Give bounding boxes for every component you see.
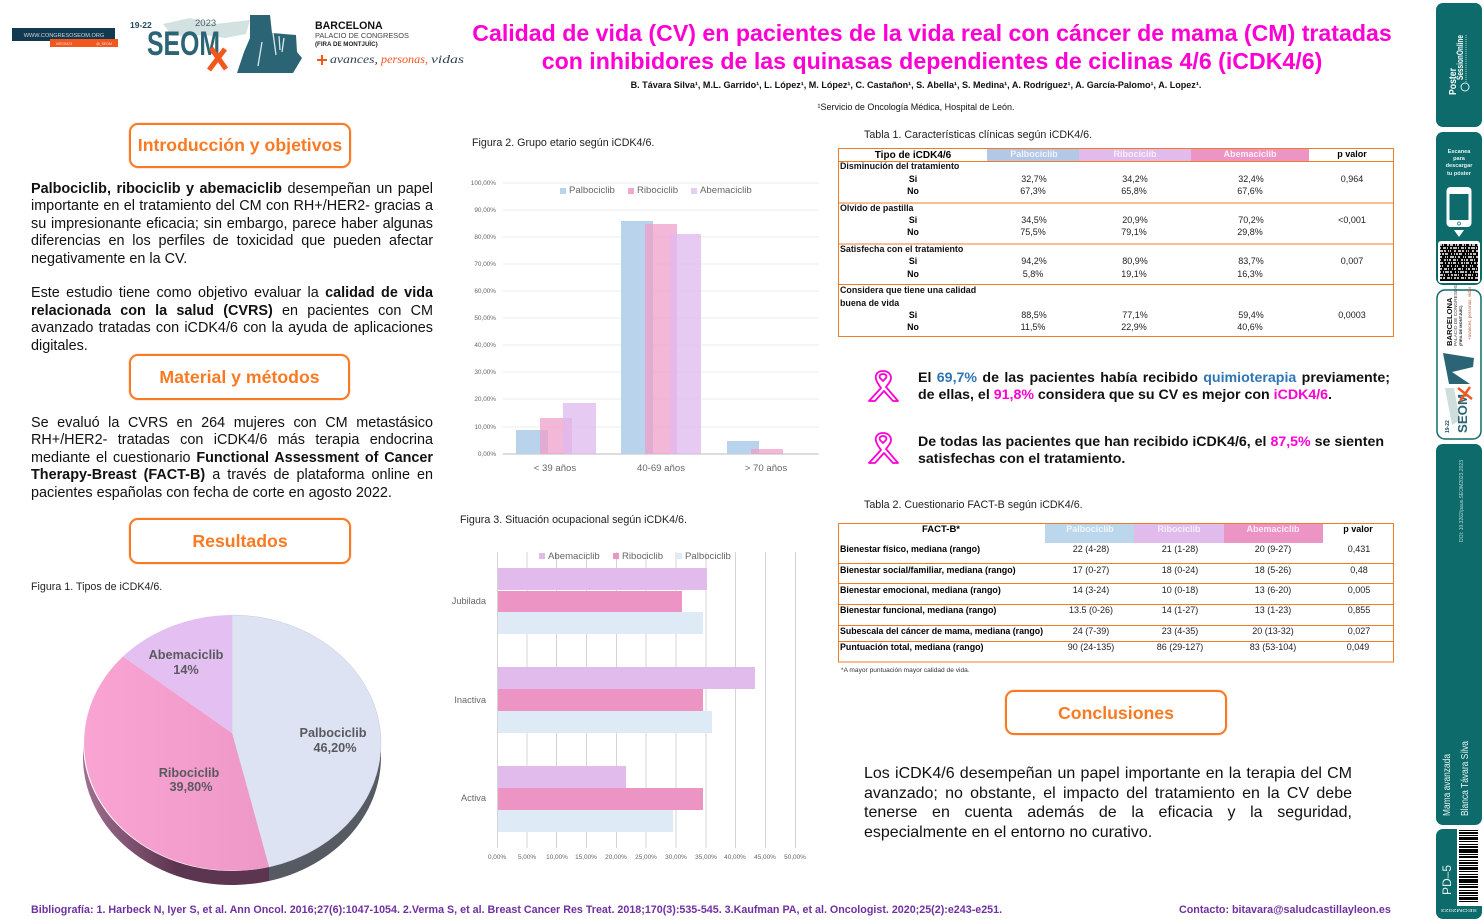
- panel: Poster Session Online: [1436, 3, 1482, 127]
- row labels: Olvido de pastilla: [840, 203, 914, 213]
- panel: poster code and barcode: PD–5: [1440, 865, 1454, 895]
- panel: poster code and barcode: SEOM2023: [1440, 908, 1477, 913]
- tagline: vidas: [431, 54, 465, 66]
- bar chart: situación ocupacional: [452, 551, 806, 861]
- heading: Conclusiones: [1005, 690, 1227, 735]
- title: con inhibidores de las quinasas dependientes de ciclinas 4/6 (iCDK4/6): [542, 48, 1322, 74]
- website banner: [12, 28, 118, 47]
- category labels: [452, 596, 487, 803]
- legend: Ribociclib: [622, 551, 663, 562]
- SEOM brush logo: 19-22: [130, 20, 152, 30]
- x axis labels: 20,00%: [605, 854, 627, 861]
- text: métodos: mediante el cuestionario Functional Assessment of Cancer: [31, 450, 433, 466]
- callout: quimioterapia: [918, 370, 1390, 403]
- values: 79,1%: [1121, 227, 1147, 237]
- row labels: [840, 161, 976, 308]
- values: 94,2%: [1021, 256, 1047, 266]
- values: 0,049: [1347, 642, 1369, 652]
- row labels: Bienestar funcional, mediana (rango): [840, 605, 996, 615]
- y axis labels: 10,00%: [474, 424, 496, 431]
- tagline: [317, 54, 465, 66]
- y axis labels: 50,00%: [474, 315, 496, 322]
- text: introducción: avanzado tratadas con iCDK4/6 con la ayuda de aplicaciones: [31, 320, 433, 336]
- legend: Abemaciclib: [548, 551, 600, 562]
- si no labels: No: [907, 269, 919, 279]
- pie chart: tipos de iCDK4/6: [83, 614, 382, 885]
- values: 20 (13-32): [1252, 626, 1294, 636]
- caption: figura 2: Figura 2. Grupo etario según iCDK4/6.: [472, 137, 654, 149]
- callout: quimioterapia: de ellas, el 91,8% considera que su CV es mejor con iCDK4/6.: [918, 387, 1332, 403]
- panel: poster code and barcode: [1436, 829, 1482, 919]
- values: 23 (4-35): [1162, 626, 1198, 636]
- values: 22 (4-28): [1073, 544, 1109, 554]
- table note: *A mayor puntuación mayor calidad de vida.: [841, 667, 970, 674]
- bibliography: Bibliografía: 1. Harbeck N, Iyer S, et al. Ann Oncol. 2016;27(6):1047-1054. 2.Verma S, et al. Breast Cancer Res Treat. 2018;170(3):535-545. 3.Kaufman PA, et al. Oncologist. 2020;25(2):e243-e251.: [31, 904, 1002, 916]
- values: 0,964: [1341, 174, 1363, 184]
- y axis labels: 70,00%: [474, 261, 496, 268]
- pie labels: 46,20%: [313, 741, 357, 755]
- x axis labels: 25,00%: [635, 854, 657, 861]
- heading: Resultados: Resultados: [192, 531, 288, 551]
- values: 40,6%: [1237, 322, 1263, 332]
- panel: metadata: Blanca Távara Silva: [1460, 741, 1471, 816]
- x axis labels: 35,00%: [695, 854, 717, 861]
- legend: [539, 551, 731, 562]
- QR code: [1438, 241, 1480, 283]
- values: 16,3%: [1237, 269, 1263, 279]
- values: 77,1%: [1122, 310, 1148, 320]
- panel: SEOM logo rotated: [1437, 285, 1481, 439]
- table 2: FACT-B: [838, 523, 1394, 662]
- panel: metadata: DOI: 10.3262/paus.SEOM2023.2023: [1459, 460, 1465, 542]
- y axis labels: 80,00%: [474, 234, 496, 241]
- values: 67,3%: [1020, 186, 1046, 196]
- values: [1068, 544, 1370, 652]
- row labels: Bienestar emocional, mediana (rango): [840, 585, 1001, 595]
- si no labels: No: [907, 322, 919, 332]
- values: 17 (0-27): [1073, 565, 1109, 575]
- text: métodos: pacientes españolas con fecha de corte en agosto 2022.: [31, 485, 392, 501]
- slice: Ribociclib: [84, 656, 269, 871]
- values: 90 (24-135): [1068, 642, 1114, 652]
- panel: QR download: Escanea: [1448, 149, 1471, 155]
- venue text: [315, 20, 409, 48]
- pie labels: Ribociclib: [159, 766, 220, 780]
- x axis labels: 50,00%: [784, 854, 806, 861]
- text: introducción: su impresionante eficacia; sin embargo, parece haber algunas: [31, 216, 433, 232]
- SEOM brush logo: SEOM: [147, 25, 220, 63]
- callout: quimioterapia: El 69,7% de las pacientes había recibido quimioterapia previamente;: [918, 370, 1390, 386]
- tagline: personas,: [380, 54, 428, 66]
- values: 13 (6-20): [1255, 585, 1291, 595]
- values: 88,5%: [1021, 310, 1047, 320]
- panel: SEOM logo rotated: +avances, personas, vidas: [1467, 286, 1472, 340]
- values: 75,5%: [1020, 227, 1046, 237]
- row labels: buena de vida: [840, 298, 899, 308]
- text: introducción: importante en el tratamiento del CM con RH+/HER2- gracias a: [31, 198, 433, 214]
- values: 0,0003: [1338, 310, 1366, 320]
- panel: metadata: [1436, 444, 1482, 825]
- SEOM brush logo: 2023: [195, 18, 216, 29]
- row labels: Considera que tiene una calidad: [840, 285, 976, 295]
- header labels: p valor: [1337, 149, 1367, 159]
- row labels: Disminución del tratamiento: [840, 161, 960, 171]
- text: conclusiones: [864, 765, 1352, 841]
- heading: Conclusiones: Conclusiones: [1058, 702, 1174, 722]
- text: introducción: [31, 181, 434, 354]
- values: <0,001: [1338, 215, 1366, 225]
- icon: phone: [1446, 187, 1472, 227]
- venue text: (FIRA DE MONTJUÏC): [315, 41, 378, 48]
- x axis labels: 30,00%: [665, 854, 687, 861]
- values: 0,431: [1348, 544, 1370, 554]
- x axis labels: 10,00%: [546, 854, 568, 861]
- venue text: PALACIO DE CONGRESOS: [315, 31, 409, 40]
- legend: Palbociclib: [685, 551, 731, 562]
- website banner: WWW.CONGRESOSEOM.ORG: [24, 33, 104, 39]
- legend: [560, 185, 752, 196]
- header labels: Abemaciclib: [1223, 149, 1277, 159]
- panel: Poster Session Online: SessionOnline: [1455, 35, 1465, 80]
- bars: Palbociclib: [516, 221, 759, 454]
- row labels: Subescala del cáncer de mama, mediana (rango): [840, 626, 1043, 636]
- text: métodos: Se evaluó la CVRS en 264 mujeres con CM metastásico: [31, 415, 433, 431]
- x axis labels: [534, 463, 787, 474]
- values: 59,4%: [1238, 310, 1264, 320]
- text: conclusiones: especialmente en el entorno no curativo.: [864, 824, 1152, 841]
- values: 13 (1-23): [1255, 605, 1291, 615]
- row labels: Bienestar social/familiar, mediana (rango): [840, 565, 1016, 575]
- heading: Introducción y objetivos: [129, 123, 351, 168]
- text: introducción: Este estudio tiene como objetivo evaluar la calidad de vida: [31, 285, 433, 301]
- heading: Introducción y objetivos: Introducción y objetivos: [138, 134, 342, 154]
- y axis labels: 90,00%: [474, 207, 496, 214]
- panel: Poster Session Online: Poster: [1448, 68, 1459, 95]
- y axis labels: [471, 180, 496, 458]
- text: introducción: relacionada con la salud (CVRS) en pacientes con CM: [31, 303, 433, 319]
- pie depth: [83, 743, 381, 885]
- x axis labels: 15,00%: [575, 854, 597, 861]
- callout: satisfacción: satisfechas con el tratamiento.: [918, 451, 1125, 467]
- callout: satisfacción: De todas las pacientes que han recibido iCDK4/6, el 87,5% se sienten: [918, 434, 1384, 450]
- si no labels: Si: [909, 256, 917, 266]
- values: 18 (0-24): [1162, 565, 1198, 575]
- values: 5,8%: [1023, 269, 1043, 279]
- x axis labels: [488, 854, 806, 861]
- values: 34,2%: [1122, 174, 1148, 184]
- category labels: Activa: [461, 793, 487, 803]
- panel: SEOM logo rotated: (FIRA DE MONTJUÏC): [1458, 305, 1463, 346]
- panel: QR download: para: [1453, 156, 1466, 162]
- x axis labels: < 39 años: [534, 463, 576, 474]
- caption: tabla 2: Tabla 2. Cuestionario FACT-B según iCDK4/6.: [864, 499, 1083, 511]
- y axis labels: 40,00%: [474, 342, 496, 349]
- contact: Contacto: bitavara@saludcastillayleon.es: [1179, 904, 1391, 916]
- bars: Activa: [498, 766, 703, 832]
- values: 80,9%: [1122, 256, 1148, 266]
- text: conclusiones: Los iCDK4/6 desempeñan un papel importante en la terapia del CM: [864, 765, 1352, 782]
- si no labels: No: [907, 227, 919, 237]
- values: 32,4%: [1238, 174, 1264, 184]
- pie labels: Palbociclib: [300, 726, 367, 740]
- values: 0,855: [1348, 605, 1370, 615]
- heading: Resultados: [129, 518, 351, 564]
- si no labels: [907, 174, 919, 332]
- values: 67,6%: [1237, 186, 1263, 196]
- slice: Abemaciclib: [123, 615, 232, 733]
- values: 20 (9-27): [1255, 544, 1291, 554]
- x axis labels: 40-69 años: [637, 463, 685, 474]
- header labels: Abemaciclib: [1246, 524, 1300, 534]
- icon: arrow down: [1454, 230, 1464, 237]
- legend: Ribociclib: [637, 185, 678, 196]
- title: Calidad de vida (CV) en pacientes de la vida real con cáncer de mama (CM) tratadas: [472, 20, 1392, 46]
- text: métodos: [31, 415, 433, 501]
- bars: Ribociclib: [540, 224, 783, 454]
- pie labels: 39,80%: [169, 780, 213, 794]
- values: 32,7%: [1021, 174, 1047, 184]
- venue text: BARCELONA: [315, 20, 383, 32]
- y axis labels: 60,00%: [474, 288, 496, 295]
- bar chart: grupo etario: [471, 180, 819, 474]
- values: 83,7%: [1238, 256, 1264, 266]
- sidebar: [1436, 3, 1482, 919]
- bars: Jubilada: [498, 568, 707, 634]
- x axis labels: 5,00%: [518, 854, 536, 861]
- text: métodos: Therapy-Breast (FACT-B) a través de plataforma online en: [31, 467, 433, 483]
- header labels: Ribociclib: [1113, 149, 1157, 159]
- header labels: p valor: [1343, 524, 1373, 534]
- x axis labels: 40,00%: [724, 854, 746, 861]
- panel: SEOM logo rotated: SEOM: [1455, 394, 1470, 433]
- caption: figura 3: Figura 3. Situación ocupacional según iCDK4/6.: [460, 514, 687, 526]
- bars: Abemaciclib: [563, 234, 701, 454]
- si no labels: No: [907, 186, 919, 196]
- icon: pink ribbon: [868, 370, 899, 402]
- text: introducción: negativamente en la CV.: [31, 251, 187, 267]
- text: introducción: diferencias en los perfiles de toxicidad que pueden afectar: [31, 233, 433, 249]
- values: 13.5 (0-26): [1069, 605, 1113, 615]
- row labels: [840, 544, 1043, 652]
- website banner: @_SEOM: [96, 42, 112, 46]
- values: 21 (1-28): [1162, 544, 1198, 554]
- heading: Material y métodos: [129, 354, 350, 400]
- affiliation: ¹Servicio de Oncología Médica, Hospital de León.: [818, 102, 1014, 112]
- panel: QR download: descargar: [1446, 163, 1473, 169]
- y axis labels: 0,00%: [478, 451, 496, 458]
- values: 0,007: [1341, 256, 1363, 266]
- si no labels: Si: [909, 215, 917, 225]
- caption: figura 1: Figura 1. Tipos de iCDK4/6.: [31, 581, 162, 593]
- header labels: Palbociclib: [1010, 149, 1058, 159]
- values: 0,027: [1348, 626, 1370, 636]
- values: 70,2%: [1238, 215, 1264, 225]
- panel: SEOM logo rotated: PALACIO DE CONGRESOS: [1453, 285, 1459, 346]
- tagline: avances,: [330, 54, 378, 66]
- text: introducción: Palbociclib, ribociclib y abemaciclib desempeñan un papel: [31, 181, 433, 197]
- y axis labels: 30,00%: [474, 369, 496, 376]
- values: 29,8%: [1237, 227, 1263, 237]
- table 1: características clínicas: [838, 148, 1394, 337]
- category labels: Jubilada: [452, 596, 487, 606]
- header labels: [875, 149, 1367, 161]
- legend: Abemaciclib: [700, 185, 752, 196]
- text: introducción: digitales.: [31, 338, 88, 354]
- header logo: congress SEOM: [12, 15, 465, 73]
- values: 18 (5-26): [1255, 565, 1291, 575]
- header labels: Ribociclib: [1157, 524, 1201, 534]
- values: 20,9%: [1122, 215, 1148, 225]
- values: 10 (0-18): [1162, 585, 1198, 595]
- header cells: [1045, 524, 1323, 543]
- bars: Inactiva: [498, 667, 755, 733]
- text: conclusiones: avanzado; no obstante, el impacto del tratamiento en la CV debe: [864, 785, 1352, 802]
- values: 65,8%: [1121, 186, 1147, 196]
- row labels: Satisfecha con el tratamiento: [840, 244, 964, 254]
- values: 0,48: [1350, 565, 1368, 575]
- y axis labels: 20,00%: [474, 396, 496, 403]
- website banner: #SEOM23: [56, 42, 72, 46]
- values: 22,9%: [1121, 322, 1147, 332]
- slice: Palbociclib: [232, 615, 381, 867]
- x axis labels: 0,00%: [488, 854, 506, 861]
- values: 83 (53-104): [1250, 642, 1296, 652]
- values: 24 (7-39): [1073, 626, 1109, 636]
- callout: satisfacción: [918, 434, 1384, 467]
- title: [472, 20, 1392, 74]
- values: 0,005: [1348, 585, 1370, 595]
- caption: tabla 1: Tabla 1. Características clínicas según iCDK4/6.: [864, 129, 1092, 141]
- values: 14 (3-24): [1073, 585, 1109, 595]
- values: 19,1%: [1121, 269, 1147, 279]
- SEOM brush logo: [130, 15, 302, 73]
- legend: Palbociclib: [569, 185, 615, 196]
- header labels: [922, 524, 1373, 535]
- panel: QR download: tu póster: [1447, 171, 1472, 177]
- header labels: Tipo de iCDK4/6: [875, 150, 952, 161]
- text: conclusiones: tenerse en cuenta además de la eficacia y la seguridad,: [864, 804, 1352, 821]
- x axis labels: > 70 años: [745, 463, 787, 474]
- pie labels: 14%: [173, 663, 199, 677]
- icon: pink ribbon: [868, 432, 899, 464]
- panel: SEOM logo rotated: BARCELONA: [1445, 297, 1454, 346]
- values: 14 (1-27): [1162, 605, 1198, 615]
- category labels: Inactiva: [454, 695, 487, 705]
- row labels: Bienestar físico, mediana (rango): [840, 544, 980, 554]
- header labels: FACT-B*: [922, 524, 960, 535]
- header labels: Palbociclib: [1066, 524, 1114, 534]
- x axis labels: 45,00%: [754, 854, 776, 861]
- pie labels: [149, 648, 367, 794]
- row labels: Puntuación total, mediana (rango): [840, 642, 984, 652]
- header cells: [987, 149, 1309, 161]
- panel: SEOM logo rotated: 19-22: [1445, 420, 1451, 433]
- si no labels: Si: [909, 174, 917, 184]
- panel: QR download: [1436, 132, 1482, 285]
- pie labels: Abemaciclib: [149, 648, 224, 662]
- values: 11,5%: [1021, 322, 1045, 332]
- authors: B. Távara Silva¹, M.L. Garrido¹, L. López¹, M. López¹, C. Castañon¹, S. Abella¹, S. Medina¹, A. Rodríguez¹, A. García-Palomo¹, A. Lopez¹.: [631, 80, 1201, 90]
- y axis labels: 100,00%: [471, 180, 496, 187]
- text: métodos: RH+/HER2- tratadas con iCDK4/6 más terapia endocrina: [31, 432, 433, 448]
- heading: Material y métodos: Material y métodos: [159, 367, 320, 387]
- values: [1020, 174, 1366, 332]
- values: 86 (29-127): [1157, 642, 1203, 652]
- values: 34,5%: [1021, 215, 1047, 225]
- panel: metadata: Mama avanzada: [1442, 754, 1453, 816]
- si no labels: Si: [909, 310, 917, 320]
